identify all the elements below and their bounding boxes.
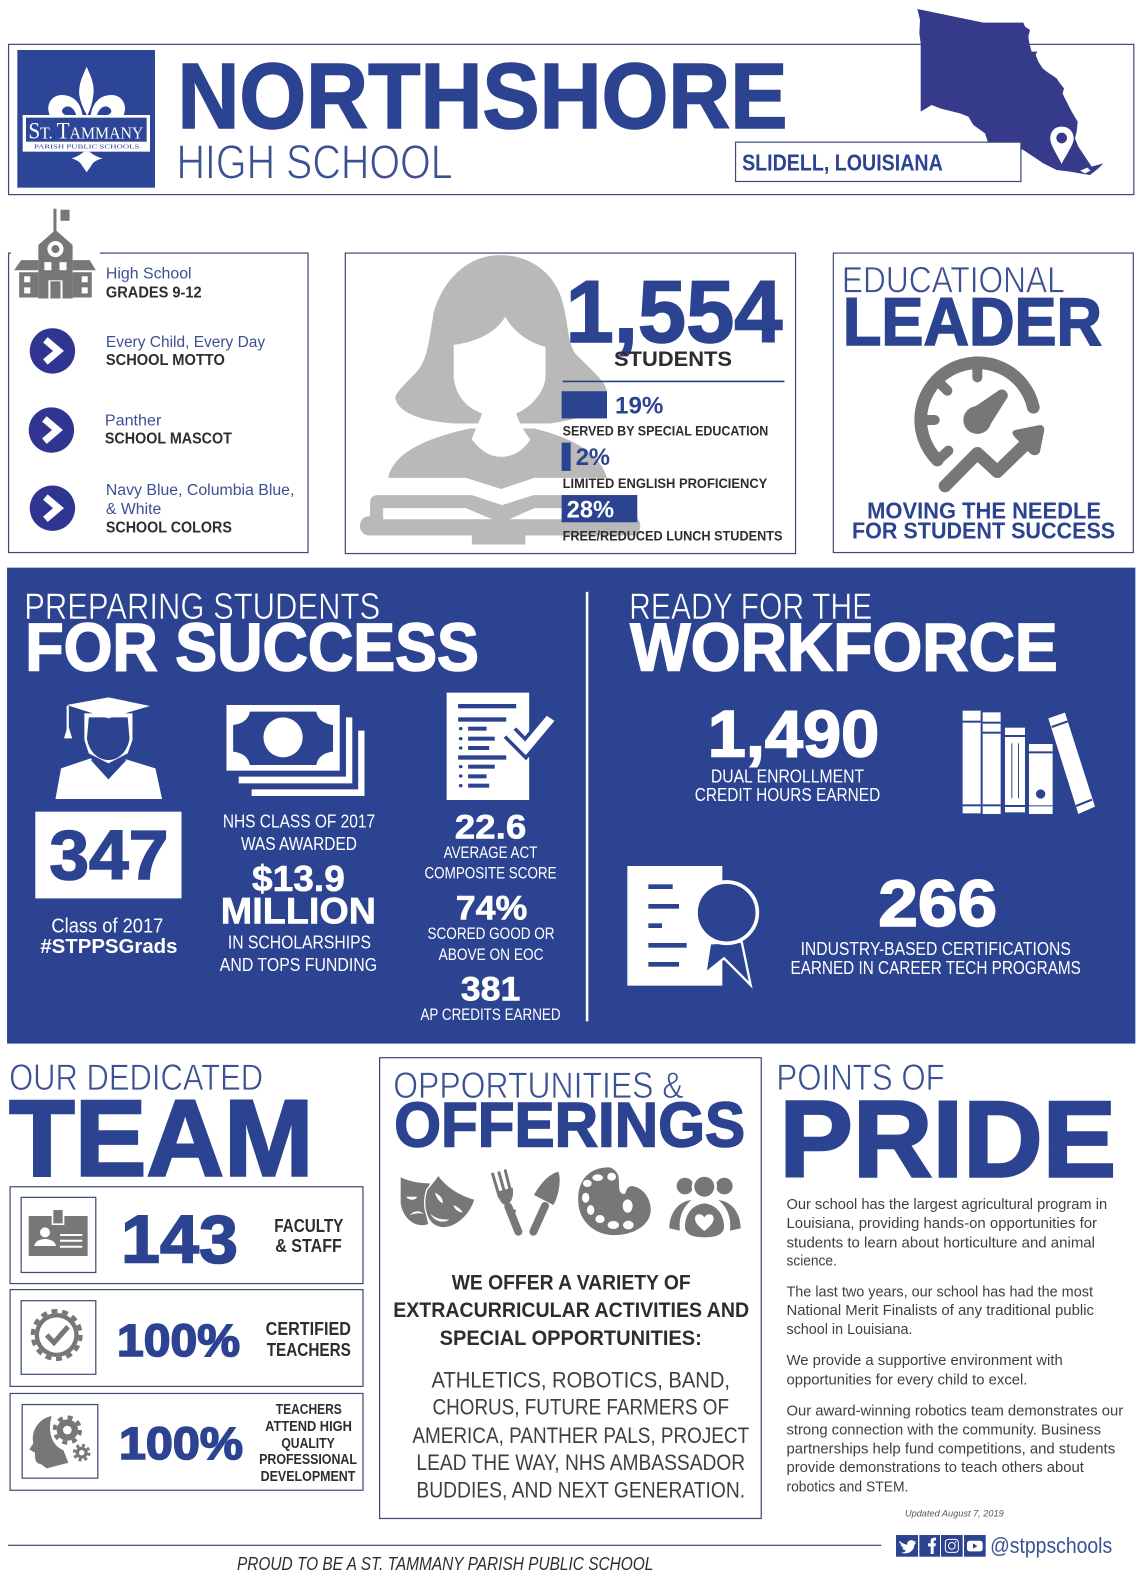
stat: limited English: LIMITED ENGLISH PROFICIENCY: [563, 475, 768, 491]
map: St. Tammany Parish: [917, 9, 1103, 175]
text: school colors: & White: [106, 500, 161, 518]
icon: artist palette: [578, 1167, 651, 1235]
panel: header: [9, 9, 1134, 195]
footer tagline: PROUD TO BE A ST. TAMMANY PARISH PUBLIC SCHOOL: [237, 1554, 653, 1574]
text: activities list: CHORUS, FUTURE FARMERS OF: [433, 1395, 729, 1420]
stat: EOC: 74%: [456, 890, 527, 928]
text: school mascot: Panther: [105, 411, 162, 429]
text: points of pride paragraphs: school in Louisiana.: [786, 1321, 913, 1338]
stat: EOC: SCORED GOOD OR: [428, 924, 555, 943]
icon: school building: [14, 209, 96, 298]
stat: certifications: EARNED IN CAREER TECH PROGRAMS: [790, 957, 1081, 978]
heading: ready for the workforce: WORKFORCE: [630, 611, 1058, 686]
stat: total students: STUDENTS: [614, 346, 732, 371]
text: activities list: BUDDIES, AND NEXT GENERATION.: [416, 1477, 745, 1502]
stat: ACT score: COMPOSITE SCORE: [424, 864, 557, 883]
panel: professional development: DEVELOPMENT: [261, 1469, 355, 1485]
text: offer statement: EXTRACURRICULAR ACTIVITIES AND: [393, 1299, 749, 1322]
stat: scholarships: IN SCHOLARSHIPS: [228, 931, 371, 952]
stat: special education: 19%: [615, 392, 663, 419]
stat: graduates: Class of 2017: [51, 915, 163, 938]
text: school motto: [106, 333, 266, 369]
panel: certified teachers: TEACHERS: [267, 1339, 351, 1360]
heading: preparing students for success: PREPARING STUDENTS: [24, 585, 380, 627]
stat: dual enrollment: DUAL ENROLLMENT: [711, 765, 864, 786]
text: offer statement: WE OFFER A VARIETY OF: [452, 1272, 691, 1295]
tagline: MOVING THE NEEDLE: [867, 497, 1101, 523]
icon: chevron bullet motto: [30, 328, 75, 374]
icon: fork and trowel: [493, 1171, 560, 1232]
text: school colors: [106, 481, 294, 536]
icon: checklist: [447, 693, 551, 800]
text: points of pride paragraphs: Our award-winning robotics team demonstrates our: [786, 1403, 1123, 1420]
text: points of pride paragraphs: opportunities for every child to excel.: [786, 1371, 1027, 1388]
stat: certifications: [790, 867, 1081, 978]
panel: professional development: TEACHERS: [276, 1402, 342, 1418]
stat: free and reduced lunch: FREE/REDUCED LUNCH STUDENTS: [563, 527, 782, 543]
stat: free and reduced lunch: 28%: [567, 496, 614, 523]
icon: books: [963, 711, 1095, 814]
stat: scholarships: AND TOPS FUNDING: [220, 954, 377, 975]
text: points of pride paragraphs: [786, 1196, 1123, 1495]
panel: faculty and staff: 143: [121, 1202, 238, 1277]
text: activities list: [412, 1367, 750, 1502]
panel: opportunities and offerings: [380, 1058, 761, 1518]
panel: certified teachers: 100%: [117, 1315, 240, 1366]
stat: scholarships: [220, 810, 377, 975]
tagline: [852, 497, 1115, 543]
heading: educational leader: [842, 258, 1102, 360]
panel: faculty and staff: & STAFF: [275, 1235, 342, 1256]
panel: school facts: [9, 209, 308, 553]
stat: ACT score: 22.6: [455, 808, 526, 846]
heading: opportunities and offerings: OFFERINGS: [394, 1089, 745, 1160]
text: points of pride paragraphs: provide demonstrations to teach others about: [786, 1459, 1085, 1476]
stat: limited English: 2%: [576, 444, 610, 471]
icons: social media: [896, 1535, 986, 1557]
icon: certificate: [627, 866, 757, 986]
text: points of pride paragraphs: science.: [786, 1252, 837, 1269]
panel: professional development: QUALITY: [281, 1436, 335, 1452]
stat: EOC: ABOVE ON EOC: [439, 945, 543, 964]
stat: graduates: #STPPSGrads: [40, 936, 177, 958]
icon: chevron bullet colors: [30, 485, 75, 531]
stat: ACT score: AVERAGE ACT: [444, 843, 537, 862]
text: school level: [106, 264, 202, 301]
panel: students: [345, 253, 796, 554]
icon: head with gears: [29, 1414, 92, 1468]
stat: free and reduced lunch: [562, 495, 782, 543]
heading: preparing students for success: FOR SUCCESS: [25, 611, 479, 686]
icon: chevron bullet mascot: [29, 407, 74, 453]
tagline: FOR STUDENT SUCCESS: [852, 517, 1115, 543]
text: social handle: @stppschools: [990, 1533, 1112, 1558]
location label: [736, 142, 1021, 181]
text: activities list: LEAD THE WAY, NHS AMBASSADOR: [416, 1450, 745, 1475]
heading: points of pride: PRIDE: [779, 1079, 1116, 1201]
panel: certified teachers: [10, 1290, 363, 1386]
icon: theater masks: [401, 1175, 475, 1228]
text: school motto: Every Child, Every Day: [106, 333, 266, 351]
text: offer statement: [393, 1272, 749, 1350]
text: activities list: AMERICA, PANTHER PALS, PROJECT: [412, 1423, 750, 1448]
logo: St. Tammany Parish Public Schools: [17, 50, 155, 188]
text: school mascot: SCHOOL MASCOT: [105, 431, 232, 448]
stat: dual enrollment: 1,490: [708, 698, 879, 771]
title: Northshore: NORTHSHORE: [177, 44, 787, 148]
panel: professional development: [10, 1393, 363, 1490]
panel: professional development: PROFESSIONAL: [259, 1452, 357, 1468]
stat: special education: [562, 391, 768, 439]
text: points of pride paragraphs: students to learn about horticulture and animal: [786, 1234, 1095, 1251]
text: points of pride paragraphs: robotics and STEM.: [786, 1478, 908, 1495]
panel: educational leader: [833, 253, 1133, 553]
icon: community group: [669, 1174, 741, 1237]
logo: St. Tammany Parish Public Schools: PARISH PUBLIC SCHOOLS: [34, 143, 140, 150]
text: points of pride paragraphs: We provide a supportive environment with: [786, 1352, 1063, 1369]
stat: limited English: [562, 443, 768, 491]
icon: student reading silhouette: [360, 255, 640, 544]
location label: SLIDELL, LOUISIANA: [742, 149, 943, 175]
stat: scholarships: NHS CLASS OF 2017: [223, 810, 375, 831]
text: points of pride paragraphs: Our school has the largest agricultural program in: [786, 1196, 1107, 1213]
text: offer statement: SPECIAL OPPORTUNITIES:: [440, 1327, 702, 1350]
panel: faculty and staff: [10, 1187, 363, 1284]
heading: our dedicated team: OUR DEDICATED: [9, 1056, 263, 1098]
stat: special education: SERVED BY SPECIAL EDUCATION: [563, 423, 768, 439]
heading: ready for the workforce: READY FOR THE: [629, 585, 872, 627]
text: points of pride paragraphs: Louisiana, providing hands-on opportunities for: [786, 1215, 1097, 1232]
text: school level: GRADES 9-12: [106, 284, 202, 301]
icon: ID badge: [29, 1208, 88, 1256]
subtitle: High School: HIGH SCHOOL: [176, 135, 453, 189]
panel: professional development: ATTEND HIGH: [265, 1419, 352, 1435]
text: points of pride paragraphs: partnerships help fund competitions, and students: [786, 1440, 1116, 1457]
logo: St. Tammany Parish Public Schools: ST. TAMMANY: [28, 118, 144, 144]
heading: educational leader: LEADER: [843, 285, 1102, 360]
stat: scholarships: MILLION: [221, 890, 376, 932]
stat: dual enrollment: CREDIT HOURS EARNED: [695, 784, 880, 805]
heading: points of pride: POINTS OF: [776, 1056, 945, 1098]
heading: educational leader: EDUCATIONAL: [842, 258, 1065, 300]
text: school motto: SCHOOL MOTTO: [106, 352, 225, 369]
panel: success and workforce band: [7, 568, 1135, 1044]
stat: scholarships: $13.9: [252, 858, 345, 899]
stat: scholarships: WAS AWARDED: [241, 833, 357, 854]
stat: graduates: 347: [49, 816, 168, 894]
stat: certifications: INDUSTRY-BASED CERTIFICATIONS: [801, 938, 1071, 959]
stat: AP credits: AP CREDITS EARNED: [420, 1005, 561, 1024]
icon: money stack: [226, 705, 364, 796]
text: school mascot: [105, 411, 232, 448]
heading: opportunities and offerings: OPPORTUNITIES &: [393, 1064, 684, 1106]
panel: certified teachers: CERTIFIED: [266, 1318, 351, 1339]
text: points of pride paragraphs: strong connection with the community. Business: [786, 1421, 1101, 1438]
icon: speedometer with rising arrow: [921, 363, 1044, 486]
stat: EOC: [428, 890, 555, 964]
text: activities list: ATHLETICS, ROBOTICS, BAND,: [432, 1367, 730, 1392]
panel: faculty and staff: FACULTY: [274, 1215, 344, 1236]
heading: our dedicated team: TEAM: [9, 1078, 314, 1200]
text: school colors: Navy Blue, Columbia Blue,: [106, 481, 294, 499]
stat: graduates: [35, 812, 181, 958]
stat: total students: 1,554: [566, 263, 783, 361]
text: school level: High School: [106, 264, 192, 282]
icon: graduate: [56, 697, 162, 799]
stat: ACT score: [424, 808, 557, 883]
text: school colors: SCHOOL COLORS: [106, 519, 232, 536]
text: points of pride paragraphs: The last two years, our school has had the most: [786, 1284, 1094, 1301]
icon: certified badge: [33, 1311, 81, 1359]
stat: certifications: 266: [878, 867, 997, 940]
panel: professional development: 100%: [119, 1418, 243, 1469]
text: updated date: Updated August 7, 2019: [905, 1508, 1004, 1519]
stat: AP credits: 381: [461, 971, 520, 1009]
stat: AP credits: [420, 971, 561, 1024]
text: points of pride paragraphs: National Merit Finalists of any traditional public: [786, 1302, 1094, 1319]
stat: dual enrollment: [695, 698, 880, 805]
